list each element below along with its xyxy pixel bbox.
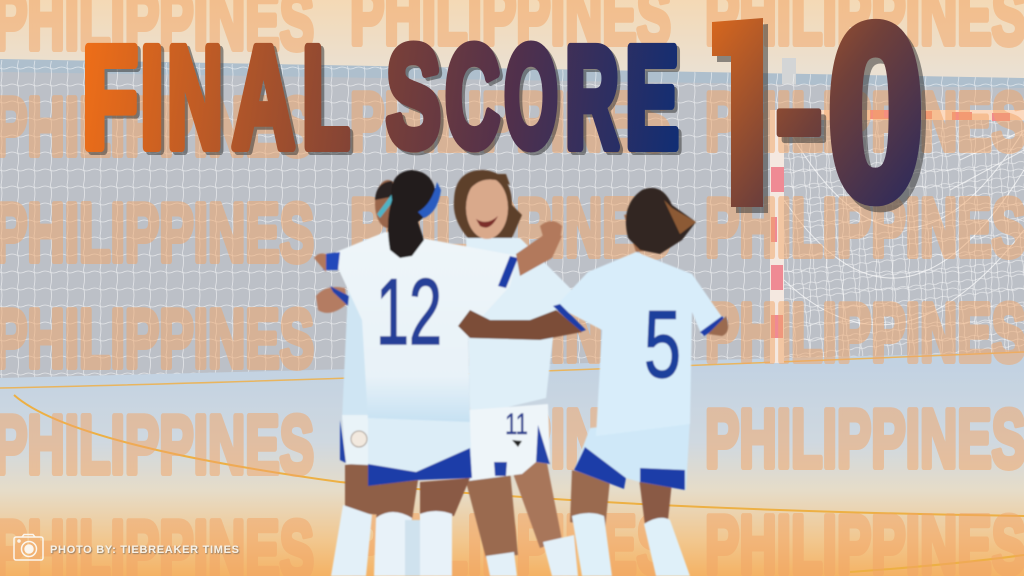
- title text: [82, 16, 679, 178]
- shorts number 11: 11: [505, 408, 528, 441]
- title text: F: [82, 17, 138, 178]
- background: futsal goal net: [0, 60, 1024, 380]
- title shadow: L: [305, 20, 353, 181]
- repeated PHILIPPINES watermark: PHILIPPINES: [0, 80, 314, 173]
- repeated PHILIPPINES watermark: PHILIPPINES: [350, 75, 671, 168]
- title text: R: [565, 17, 619, 178]
- title text: L: [302, 17, 350, 178]
- title shadow: S: [389, 19, 444, 180]
- players celebrating: [314, 170, 728, 576]
- title text: N: [167, 17, 223, 178]
- repeated PHILIPPINES watermark: PHILIPPINES: [350, 286, 671, 379]
- title text: S: [386, 16, 441, 177]
- title shadow: [85, 19, 682, 181]
- title shadow: E: [628, 20, 682, 181]
- title shadow: N: [170, 20, 226, 181]
- score text: [712, 18, 921, 207]
- score text: -: [773, 1, 825, 213]
- jersey number 5: 5: [644, 291, 681, 398]
- background: court floor: [0, 352, 1024, 576]
- title text: O: [504, 16, 558, 177]
- title: FINAL SCORE: [82, 16, 682, 181]
- score: 1-0: [712, 18, 926, 213]
- title shadow: F: [85, 20, 141, 181]
- repeated PHILIPPINES watermark: PHILIPPINES: [350, 181, 671, 274]
- player: behind, left: [316, 180, 401, 576]
- title shadow: C: [448, 19, 503, 180]
- title shadow: O: [507, 19, 561, 180]
- title text: I: [140, 17, 164, 178]
- title shadow: A: [235, 20, 298, 181]
- player: number 12: [314, 170, 562, 576]
- photo credit: PHOTO BY: TIEBREAKER TIMES: [50, 544, 239, 556]
- player: number 11: [454, 170, 578, 576]
- title shadow: R: [568, 20, 622, 181]
- score shadow: -: [778, 7, 830, 219]
- goal post and crossbar: [770, 110, 1024, 363]
- background: arena wall: [0, 0, 1024, 100]
- icon: camera: [14, 534, 43, 560]
- repeated PHILIPPINES watermark: PHILIPPINES: [0, 398, 314, 491]
- repeated PHILIPPINES watermark: PHILIPPINES: [350, 392, 671, 485]
- repeated PHILIPPINES watermark: PHILIPPINES: [0, 186, 314, 279]
- title shadow: I: [143, 20, 167, 181]
- title text: E: [625, 17, 679, 178]
- title text: A: [232, 17, 295, 178]
- jersey number 12: 12: [376, 259, 442, 364]
- player: number 5: [458, 188, 728, 576]
- repeated PHILIPPINES watermark: PHILIPPINES: [0, 292, 314, 385]
- title text: C: [445, 16, 500, 177]
- score shadow: [717, 24, 926, 213]
